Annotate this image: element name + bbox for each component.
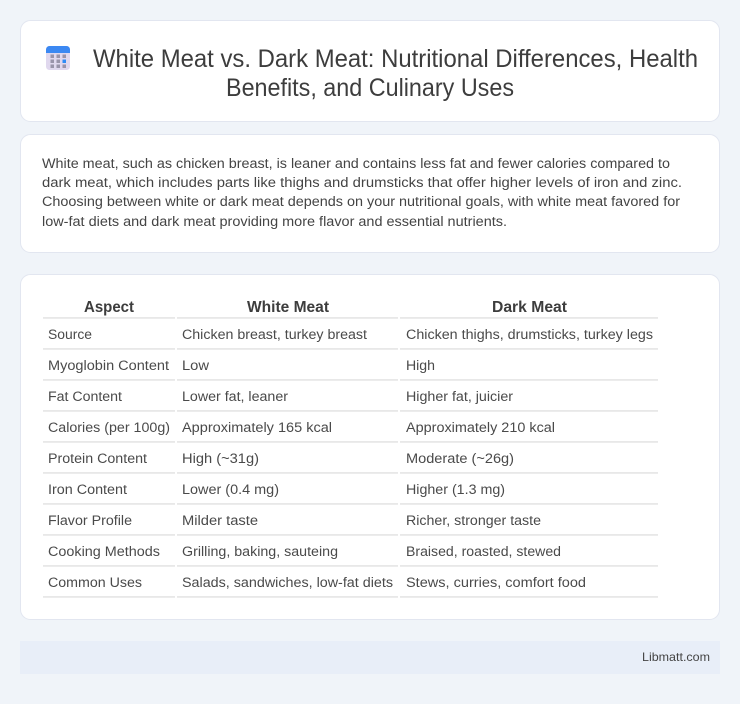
footer	[20, 641, 720, 674]
row: source: Chicken breast, turkey breast	[182, 327, 367, 343]
table header: Aspect	[84, 299, 134, 316]
table header: Dark Meat	[492, 299, 567, 316]
row: calories: Approximately 210 kcal	[406, 420, 555, 436]
row: protein content: Protein Content	[48, 451, 147, 467]
panel: introduction	[20, 134, 720, 252]
row: iron content: Lower (0.4 mg)	[182, 482, 279, 498]
text block: introduction paragraph: dark meat, which includes parts like thighs and drumsticks that offer higher levels of iron and zinc.	[42, 175, 682, 191]
title: Benefits, and Culinary Uses	[226, 74, 514, 102]
row: iron content: Higher (1.3 mg)	[406, 482, 505, 498]
row: flavor profile: Flavor Profile	[48, 513, 132, 529]
row: common uses	[48, 575, 586, 591]
row: calories	[48, 420, 555, 436]
row: iron content	[48, 482, 505, 498]
title	[93, 45, 698, 102]
row: cooking methods: Braised, roasted, stewed	[406, 544, 561, 560]
icon: calendar	[46, 46, 70, 70]
row: source: Chicken thighs, drumsticks, turkey legs	[406, 327, 653, 343]
row: calories: Approximately 165 kcal	[182, 420, 332, 436]
row: myoglobin content: High	[406, 358, 435, 374]
row: fat content	[48, 389, 513, 405]
row: protein content: High (~31g)	[182, 451, 259, 467]
text block: introduction paragraph	[42, 156, 682, 230]
row: flavor profile: Richer, stronger taste	[406, 513, 541, 529]
row: flavor profile	[48, 513, 541, 529]
row: source	[48, 327, 653, 343]
panel: title card	[20, 20, 720, 122]
footer: Libmatt.com	[642, 650, 710, 664]
title: White Meat vs. Dark Meat: Nutritional Differences, Health	[93, 45, 698, 73]
row: source: Source	[48, 327, 92, 343]
row: cooking methods: Cooking Methods	[48, 544, 160, 560]
table header	[84, 299, 567, 316]
row: fat content: Higher fat, juicier	[406, 389, 513, 405]
row: flavor profile: Milder taste	[182, 513, 258, 529]
row: fat content: Fat Content	[48, 389, 122, 405]
row: myoglobin content: Myoglobin Content	[48, 358, 169, 374]
text block: introduction paragraph: low-fat diets and dark meat providing more flavor and essential nutrients.	[42, 214, 507, 230]
row: cooking methods: Grilling, baking, sauteing	[182, 544, 338, 560]
row: common uses: Common Uses	[48, 575, 142, 591]
panel: comparison table	[20, 274, 720, 620]
row: common uses: Salads, sandwiches, low-fat diets	[182, 575, 393, 591]
row: iron content: Iron Content	[48, 482, 127, 498]
row: protein content: Moderate (~26g)	[406, 451, 514, 467]
row: fat content: Lower fat, leaner	[182, 389, 288, 405]
row: common uses: Stews, curries, comfort food	[406, 575, 586, 591]
text block: introduction paragraph: Choosing between white or dark meat depends on your nutritional goals, with white meat favored for	[42, 194, 680, 210]
row: myoglobin content	[48, 358, 435, 374]
row: protein content	[48, 451, 514, 467]
table header: White Meat	[247, 299, 329, 316]
row: myoglobin content: Low	[182, 358, 210, 374]
row: cooking methods	[48, 544, 561, 560]
text block: introduction paragraph: White meat, such as chicken breast, is leaner and contains less fat and fewer calories compared to	[42, 156, 670, 172]
row: calories: Calories (per 100g)	[48, 420, 170, 436]
